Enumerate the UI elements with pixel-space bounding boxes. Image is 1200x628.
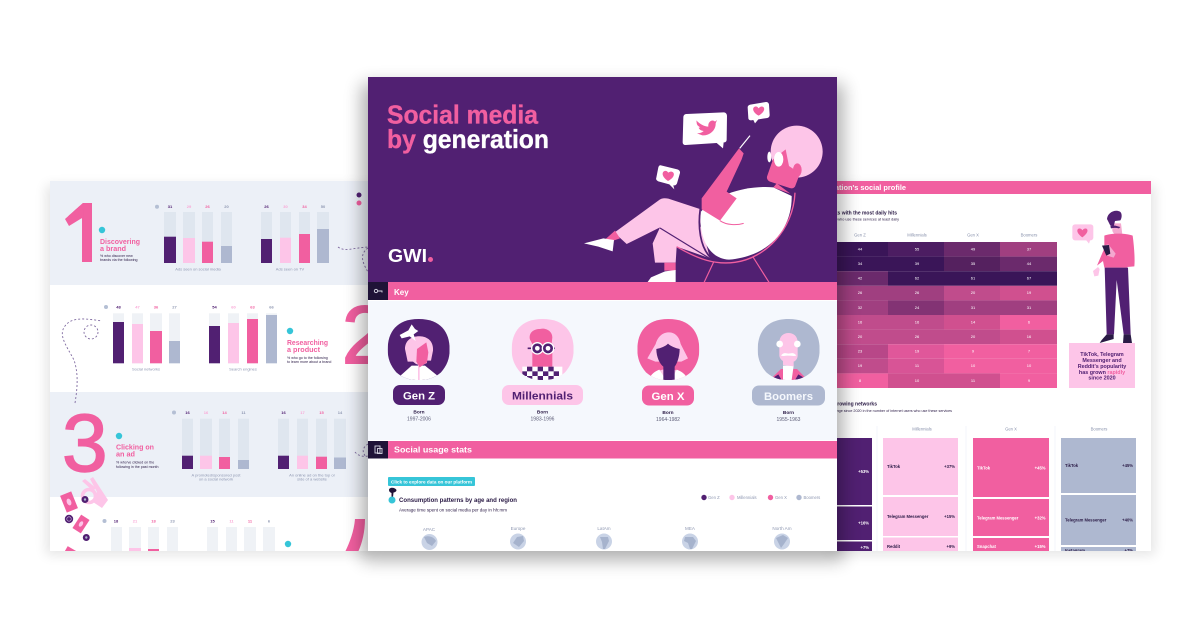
bar chart: online ad: 17 — [300, 410, 305, 415]
panel: centre page shadow — [362, 84, 843, 560]
treemap: fastest growing networks by generation: Millennials — [912, 426, 932, 432]
bar chart: ads seen on social media: 26 — [205, 204, 210, 209]
treemap column: Millennials: +15% — [944, 514, 955, 519]
section 3: clicking on an ad — [64, 410, 346, 480]
heatmap table: Gen Z — [854, 232, 866, 238]
button: explore data — [388, 477, 475, 486]
heatmap table: 26 — [858, 290, 863, 295]
bar chart: search engines: 54 — [212, 304, 217, 310]
section 4: partial charts: 23 — [170, 518, 175, 524]
description — [100, 254, 138, 262]
heatmap table: 37 — [1027, 246, 1032, 252]
heatmap table: 14 — [971, 320, 976, 324]
heatmap table: 26 — [915, 290, 920, 295]
label: Boomers: 1955-1963 — [777, 417, 801, 423]
heatmap table: 31 — [971, 305, 976, 310]
bar chart: online ad — [278, 410, 346, 482]
heading: daily hits: Networks with the most daily hits — [818, 210, 897, 216]
treemap column: Millennials: Telegram Messenger — [887, 514, 929, 519]
heading: fastest growing networks: % change since 2020 in the number of internet users who use these services — [826, 409, 952, 413]
label: Boomers: Boomers — [764, 391, 813, 403]
body — [701, 187, 792, 260]
treemap column: Gen X: Snapchat — [977, 544, 996, 549]
heading — [287, 340, 328, 354]
region globes: Europe — [511, 526, 526, 531]
section header: Each generation's social profile — [795, 183, 906, 192]
region globes: APAC — [423, 527, 436, 532]
description: following in the past month — [116, 465, 159, 469]
illustration: OK hand, money and coins — [60, 477, 108, 551]
icon: banknote — [72, 515, 90, 533]
heatmap table: 23 — [858, 348, 863, 354]
legend — [701, 495, 820, 500]
avatar: Boomers — [758, 319, 820, 380]
bar chart: promoted post: 16 — [204, 410, 209, 415]
number 2: 2 — [342, 290, 388, 381]
heatmap table: 7 — [1028, 348, 1031, 354]
heatmap table: 16 — [858, 320, 863, 324]
heading: Researching — [287, 340, 328, 347]
bar chart: ads seen on social media: 29 — [187, 204, 192, 209]
bar chart: social networks: 27 — [172, 304, 177, 310]
back leg — [653, 227, 710, 263]
treemap column: Gen Z: +16% — [858, 520, 869, 526]
icon: banknote — [65, 546, 76, 551]
label: Boomers — [752, 386, 825, 423]
bar chart: ads seen on social media — [155, 204, 232, 272]
section 4: partial charts: 11 — [229, 518, 234, 524]
bar chart: social networks: 47 — [135, 304, 140, 310]
heading: daily hits — [837, 210, 899, 222]
heatmap table: 9 — [1028, 378, 1031, 383]
label: Gen X: 1964-1982 — [656, 417, 680, 423]
avatar: Gen Z — [388, 319, 450, 380]
callout: growth of TikTok, Telegram, Reddit: Messenger and — [1082, 358, 1122, 364]
bar chart: promoted post — [172, 410, 249, 482]
icon: OK hand — [82, 477, 108, 508]
panel: right page, each generation's social profile — [837, 181, 1151, 551]
heatmap table: 20 — [971, 290, 976, 295]
panel: right page shadow — [830, 185, 1155, 555]
icon: heart bubble — [1072, 224, 1093, 244]
heatmap table: 16 — [915, 320, 920, 324]
heatmap table: 67 — [1027, 276, 1032, 280]
region globes — [422, 526, 792, 550]
avatar: Millennials — [512, 319, 574, 380]
label: Gen Z: Gen Z — [403, 390, 435, 402]
chair — [677, 193, 795, 263]
callout: growth of TikTok, Telegram, Reddit — [1069, 343, 1135, 388]
heading: a product — [287, 347, 321, 354]
region globes: MEA — [685, 526, 696, 531]
treemap column: Millennials — [883, 438, 958, 554]
bar chart: online ad: side of a website — [297, 476, 328, 482]
heading: Discovering — [100, 239, 140, 246]
section 4: partial charts: 18 — [151, 518, 156, 524]
bar chart: promoted post: 11 — [241, 410, 246, 415]
legend: Boomers — [804, 495, 820, 500]
title — [387, 100, 549, 154]
arm — [702, 148, 744, 221]
bar chart: search engines: Search engines — [229, 366, 257, 372]
icon: heart bubble left — [656, 165, 680, 189]
heatmap table: 11 — [971, 378, 976, 383]
label: Millennials: 1983-1996 — [531, 416, 555, 422]
bar chart: ads seen on TV: Ads seen on TV — [276, 266, 305, 272]
bar chart: social networks — [104, 304, 180, 372]
head — [771, 126, 823, 178]
panel: left page shadow — [46, 185, 372, 555]
number 3: 3 — [62, 398, 108, 489]
bar chart: ads seen on TV: 30 — [283, 204, 288, 209]
section header — [837, 181, 1151, 194]
heatmap table: 26 — [915, 334, 920, 339]
info badge — [99, 227, 105, 233]
bar chart: online ad: An online ad on the top or — [289, 472, 336, 478]
heatmap table: 34 — [858, 261, 863, 266]
treemap: fastest growing networks by generation — [800, 426, 1136, 554]
description: to learn more about a brand — [287, 360, 331, 364]
heatmap table: 9 — [972, 348, 975, 354]
man figure — [1093, 211, 1135, 343]
section 4: partial charts: 18 — [114, 518, 119, 524]
heatmap table: 6 — [1028, 320, 1031, 324]
logo: GWI: GWI — [388, 246, 427, 266]
heatmap table: 49 — [971, 246, 976, 252]
avatar: Gen X — [637, 319, 699, 380]
decorative path: dashed loop — [62, 247, 368, 457]
legend: Millennials — [737, 495, 757, 500]
icon: globe North America — [774, 534, 790, 550]
label: Gen Z: Born — [413, 410, 425, 416]
callout: growth of TikTok, Telegram, Reddit: TikTok, Telegram — [1080, 352, 1124, 358]
description: brands via the following — [100, 258, 138, 262]
heatmap table: 55 — [915, 246, 920, 252]
treemap column: Gen Z — [800, 438, 872, 554]
section bar: Key — [368, 282, 837, 300]
panel: purple cover header — [368, 77, 837, 283]
bar chart: social networks: Social networks — [132, 366, 160, 372]
heading: consumption patterns: Average time spent on social media per day in hh:mm — [399, 508, 508, 512]
treemap column: Gen Z: +53% — [858, 469, 869, 474]
info badge — [285, 541, 291, 547]
icon: key — [374, 289, 382, 293]
heatmap table: Gen X — [967, 232, 979, 238]
treemap column: Gen X: +45% — [1035, 466, 1046, 470]
treemap column: Millennials: +9% — [946, 544, 955, 549]
bar chart: promoted post: on a social network — [199, 476, 233, 482]
title: by generation — [387, 124, 549, 154]
treemap column: Gen Z: +7% — [860, 545, 869, 550]
heatmap table: 19 — [1027, 290, 1032, 295]
icon: globe Europe — [510, 534, 526, 550]
heatmap table: 35 — [971, 261, 976, 266]
info badge — [116, 433, 122, 439]
bar chart: search engines: 66 — [269, 304, 274, 310]
treemap column: Boomers: Telegram Messenger — [1065, 518, 1107, 522]
section 1: discovering a brand — [65, 192, 362, 270]
heatmap table: 31 — [1027, 305, 1032, 310]
bar chart: ads seen on social media: 31 — [168, 204, 173, 209]
label: Gen Z — [393, 385, 445, 422]
description: % who go to the following — [287, 356, 328, 360]
heading: fastest growing networks — [815, 402, 952, 413]
icon: banknote — [60, 491, 78, 513]
heatmap table: 10 — [915, 378, 920, 383]
section bar: Social usage stats — [368, 441, 837, 458]
treemap column: Gen X — [973, 438, 1049, 554]
label: Millennials: Millennials — [512, 390, 573, 402]
heading: Clicking on — [116, 444, 154, 452]
label: Gen X: Gen X — [652, 391, 685, 403]
icon: info badge — [388, 496, 396, 504]
heading: an ad — [116, 452, 135, 458]
bar chart: ads seen on TV: 26 — [264, 204, 269, 209]
heatmap table: 24 — [915, 305, 920, 310]
bar chart: search engines: 63 — [250, 304, 255, 310]
panel: left page, path to purchase — [50, 181, 388, 564]
character — [584, 126, 823, 283]
label: Gen X: Born — [662, 410, 674, 416]
number 4 fragment — [345, 519, 365, 552]
region globes: North Am — [772, 526, 792, 531]
description — [287, 356, 332, 363]
region globes: LatAm — [597, 526, 611, 531]
section bar: Key: Key — [394, 288, 409, 297]
treemap column: Gen X: TikTok — [977, 466, 991, 470]
heatmap table: 10 — [971, 363, 976, 368]
bar chart: ads seen on TV — [261, 204, 329, 272]
heading: consumption patterns: Consumption patterns by age and region — [399, 498, 517, 504]
description — [116, 460, 159, 469]
heatmap table: 20 — [858, 334, 863, 339]
front leg — [614, 198, 710, 257]
treemap column: Gen X: Telegram Messenger — [977, 516, 1019, 520]
panel: key of generations — [368, 301, 837, 440]
label: Gen X — [642, 386, 694, 423]
heatmap table: Millennials — [907, 232, 927, 238]
heatmap table: 39 — [915, 261, 920, 266]
treemap column: Boomers: +7% — [1124, 548, 1133, 553]
icon: globe MEA — [682, 534, 698, 550]
illustration: man with phone — [1072, 211, 1135, 343]
icon: twitter bubble — [683, 112, 727, 148]
heading: fastest growing networks: Fastest growing networks — [815, 402, 877, 408]
section 4: partial charts: 11 — [248, 518, 253, 524]
heatmap table: 62 — [915, 276, 920, 280]
heading: daily hits: % who use these services at least daily — [833, 218, 899, 222]
description: % who discover new — [100, 254, 133, 258]
treemap column: Millennials: TikTok — [887, 464, 901, 469]
heading: consumption patterns — [399, 498, 517, 512]
heading — [116, 444, 154, 456]
heatmap table: 11 — [915, 363, 920, 368]
treemap column: Millennials: Reddit — [887, 544, 901, 549]
icon: stacked pages — [375, 446, 382, 454]
treemap column: Millennials: +37% — [944, 464, 955, 469]
heatmap table: 61 — [971, 276, 976, 280]
heatmap table: 20 — [971, 334, 976, 339]
heatmap table: 16 — [1027, 334, 1032, 339]
callout: growth of TikTok, Telegram, Reddit: has grown rapidly — [1079, 370, 1125, 376]
heading: a brand — [100, 246, 126, 253]
description: % who've clicked on the — [116, 460, 154, 464]
label: Boomers: Born — [783, 410, 794, 416]
label: Millennials — [502, 385, 583, 422]
bar chart: ads seen on TV: 50 — [321, 204, 326, 209]
heatmap table: 42 — [858, 276, 863, 280]
treemap column: Boomers: +45% — [1122, 463, 1133, 468]
section 4: partial charts: 6 — [268, 518, 271, 524]
heading — [100, 238, 140, 251]
icon: globe APAC — [422, 534, 438, 550]
bar chart: search engines: 60 — [231, 304, 236, 310]
treemap column: Gen X: +32% — [1035, 516, 1046, 520]
section 2: researching a product — [104, 305, 368, 372]
section bar: Social usage stats: Social usage stats — [394, 446, 473, 454]
bar chart: search engines — [209, 304, 277, 372]
heatmap table: Boomers — [1021, 232, 1037, 238]
heatmap table: 44 — [1027, 261, 1032, 266]
treemap column: Gen X: +15% — [1035, 544, 1046, 549]
treemap column: Boomers: Instagram — [1065, 548, 1085, 553]
chair legs — [704, 257, 770, 283]
treemap: fastest growing networks by generation: Gen X — [1005, 426, 1017, 432]
treemap column: Boomers — [1061, 438, 1136, 554]
panel: centre page — [368, 77, 837, 551]
heatmap table: 19 — [915, 348, 920, 354]
bar chart: promoted post: A promoted/sponsored post — [192, 472, 241, 478]
button: explore data: Click to explore data on our platform — [391, 480, 472, 484]
legend fragment — [356, 192, 362, 206]
section 4: partial charts — [102, 519, 365, 551]
heatmap table: 32 — [858, 305, 863, 310]
legend: Gen X — [775, 495, 787, 500]
label: Millennials: Born — [537, 410, 548, 416]
bar chart: online ad: 14 — [338, 410, 343, 415]
bar chart: online ad: 16 — [281, 410, 286, 415]
callout: growth of TikTok, Telegram, Reddit: Reddit's popularity — [1078, 364, 1126, 370]
treemap column: Boomers: +40% — [1122, 518, 1133, 522]
heatmap table: 19 — [858, 363, 863, 368]
bar chart: promoted post: 14 — [222, 410, 227, 415]
section 4: partial charts: 15 — [210, 518, 215, 524]
title: Social media — [387, 100, 539, 130]
bar chart: ads seen on social media: Ads seen on social media — [175, 266, 222, 272]
heatmap table: 8 — [859, 378, 862, 383]
heatmap table: 44 — [858, 246, 863, 252]
callout: growth of TikTok, Telegram, Reddit: since 2020 — [1088, 376, 1116, 382]
icon: globe LatAm — [596, 534, 612, 550]
number 1 — [65, 203, 92, 262]
bar chart: promoted post: 16 — [185, 410, 190, 415]
illustration: man in chair with phone — [584, 102, 823, 283]
bar chart: online ad: 15 — [319, 410, 324, 415]
icon: heart bubble top — [748, 102, 770, 123]
info badge — [287, 328, 293, 334]
bar chart: ads seen on social media: 20 — [224, 204, 229, 209]
bar chart: social networks: 48 — [116, 304, 121, 310]
icon: coin — [82, 496, 88, 503]
icon: coin — [65, 515, 73, 523]
heatmap table: 10 — [1027, 363, 1032, 368]
icon: coin — [83, 534, 90, 541]
legend: Gen Z — [708, 495, 720, 500]
heatmap table — [837, 233, 1057, 388]
label: Gen Z: 1997-2006 — [407, 416, 431, 422]
icon: pointer cursor — [389, 488, 396, 497]
bar chart: social networks: 36 — [154, 304, 159, 310]
number 1: 1 — [61, 186, 108, 280]
bar chart: ads seen on TV: 34 — [302, 204, 307, 209]
treemap column: Boomers: TikTok — [1065, 463, 1079, 468]
section 4: partial charts: 21 — [133, 518, 138, 524]
treemap: fastest growing networks by generation: Boomers — [1091, 426, 1107, 432]
